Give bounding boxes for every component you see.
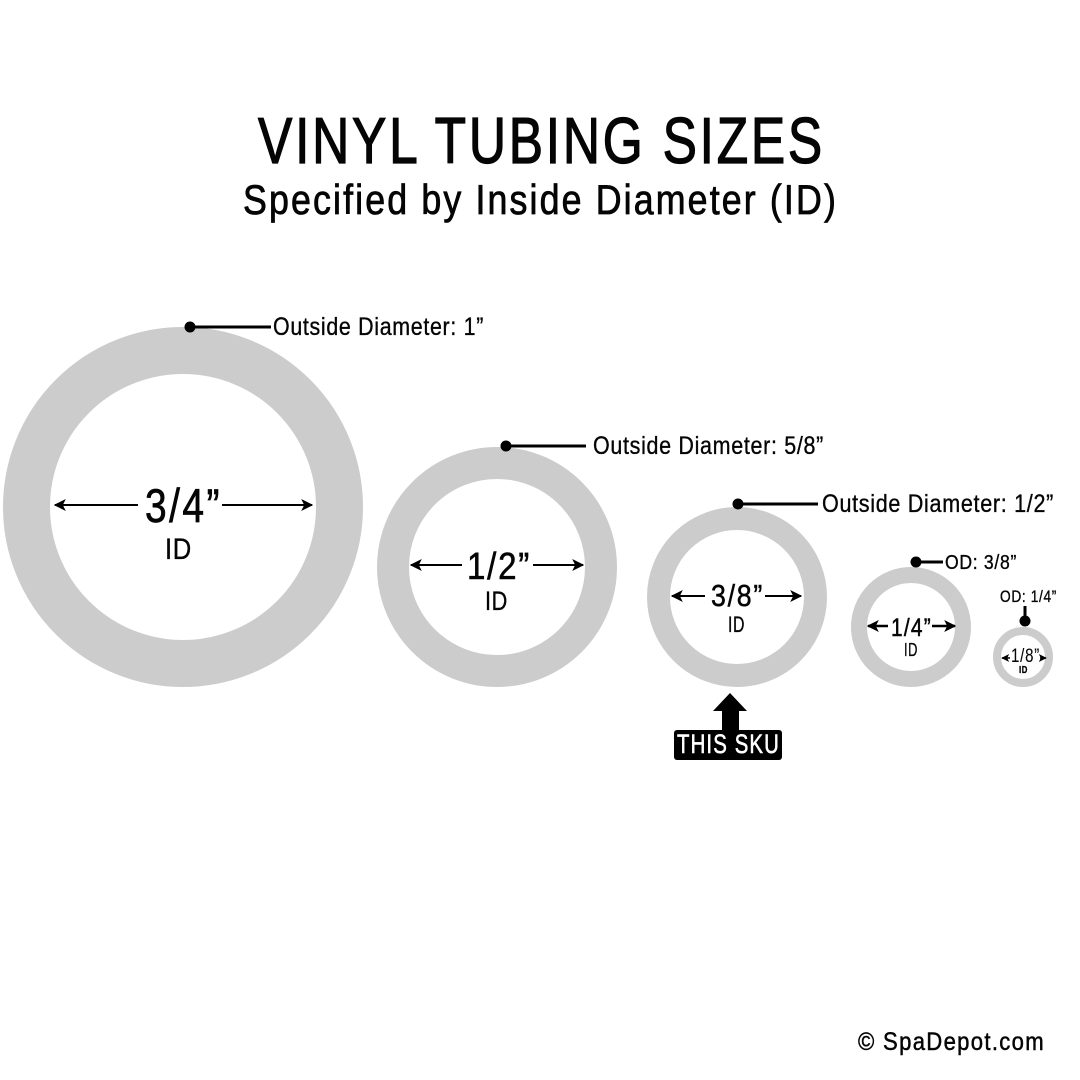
outside diameter callout: OD: 3/8” — [945, 552, 1017, 574]
ID arrows — [1002, 657, 1046, 659]
ID text: ID — [1019, 665, 1028, 676]
tube: 3/8 inch ID — [658, 490, 1054, 676]
SKU label: THIS SKU — [677, 729, 780, 759]
outside diameter callout — [732, 490, 1054, 518]
ID arrows — [672, 595, 801, 597]
ID text: ID — [904, 640, 918, 660]
ID size label: 1/8” — [1011, 646, 1040, 667]
tube: 1/8 inch ID — [997, 587, 1057, 683]
ID size label: 1/4” — [891, 614, 932, 642]
title: VINYL TUBING SIZES — [258, 104, 825, 177]
ring — [26, 350, 340, 664]
ID text: ID — [485, 586, 508, 616]
ring — [658, 518, 816, 676]
ID arrows — [411, 564, 583, 566]
tube: 1/4 inch ID — [859, 552, 1017, 679]
outside diameter callout — [910, 552, 1017, 574]
ring — [393, 463, 601, 671]
tube: 3/4 inch ID — [26, 313, 484, 664]
outside diameter callout — [500, 432, 824, 460]
outside diameter callout — [184, 313, 484, 341]
subtitle: Specified by Inside Diameter (ID) — [243, 176, 838, 223]
outside diameter callout: Outside Diameter: 5/8” — [593, 432, 824, 460]
ID size label: 1/2” — [467, 546, 531, 588]
ring — [997, 631, 1049, 683]
this SKU marker — [674, 693, 782, 760]
outside diameter callout: OD: 1/4” — [1000, 587, 1057, 606]
ID text: ID — [165, 533, 192, 566]
ID arrows — [55, 504, 312, 506]
tube: 1/2 inch ID — [393, 432, 824, 671]
SKU badge — [674, 730, 782, 760]
ID size label: 3/4” — [145, 479, 222, 532]
ID arrows — [868, 625, 955, 627]
ring — [859, 575, 963, 679]
outside diameter callout: Outside Diameter: 1” — [273, 313, 484, 341]
copyright: © SpaDepot.com — [858, 1028, 1045, 1056]
up arrow — [713, 693, 747, 732]
ID size label: 3/8” — [711, 578, 764, 613]
ID text: ID — [728, 612, 745, 637]
